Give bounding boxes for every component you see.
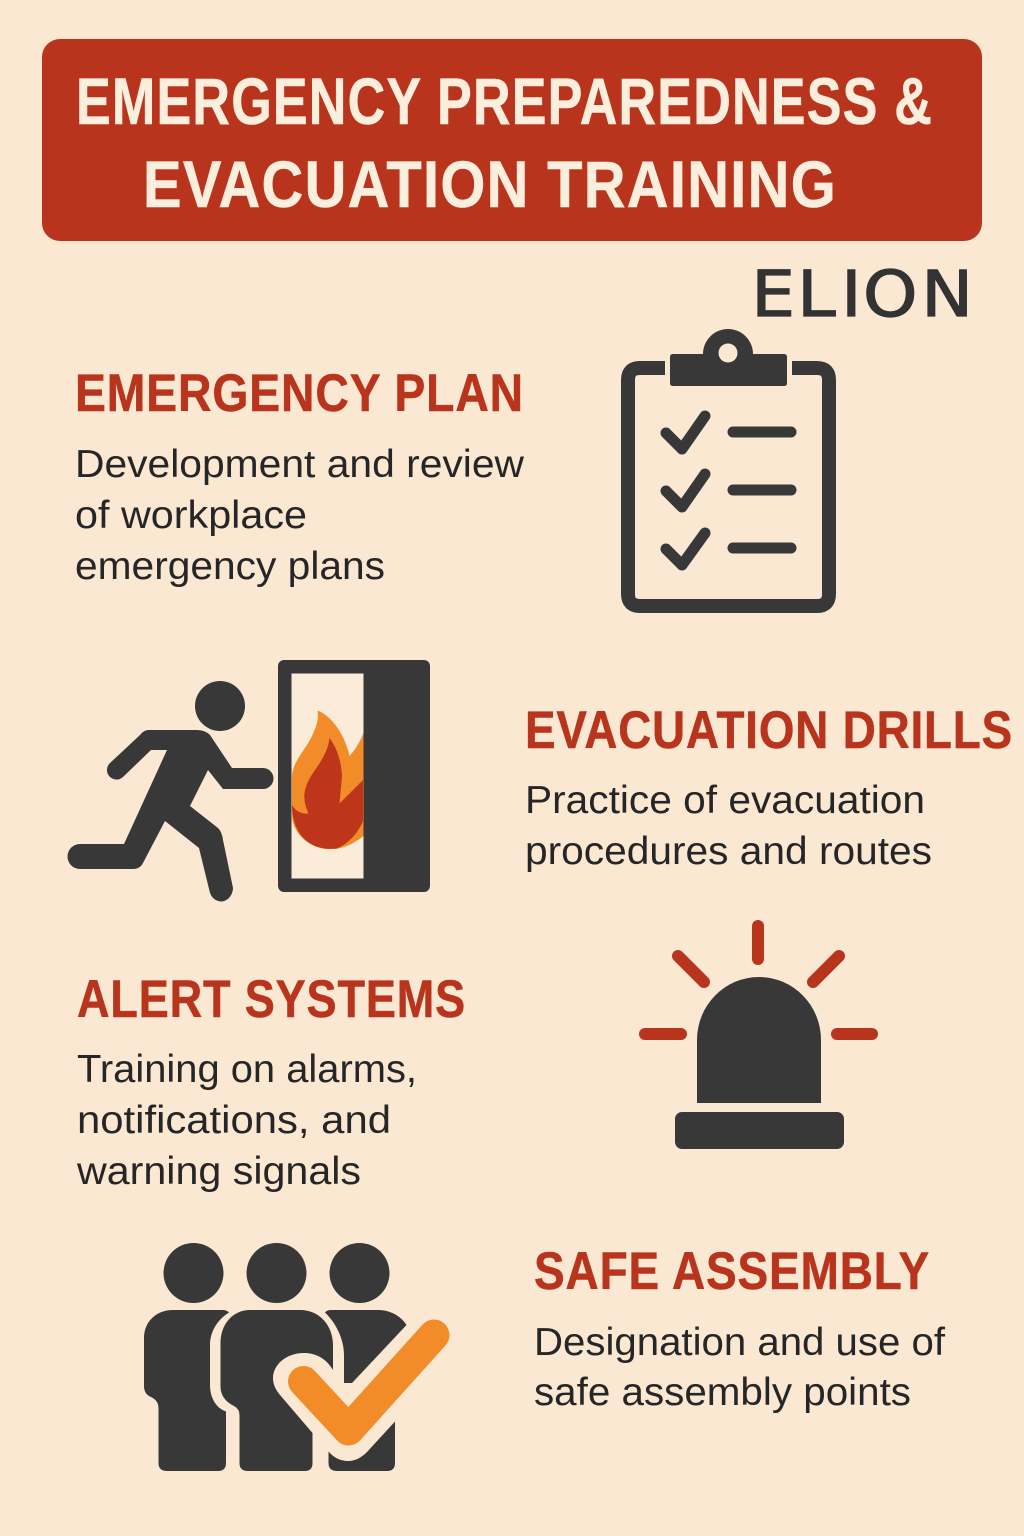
icon: clipboard checklist bbox=[628, 329, 829, 606]
text: alert systems description: notifications, and bbox=[77, 1099, 391, 1142]
title banner bbox=[42, 39, 982, 241]
text: evacuation drills description: Practice of evacuation bbox=[525, 779, 925, 822]
panel: evacuation drills bbox=[67, 660, 1013, 901]
heading: safe assembly: SAFE ASSEMBLY bbox=[534, 1242, 930, 1301]
text: emergency plan description: Development and review bbox=[75, 443, 525, 486]
heading: alert systems: ALERT SYSTEMS bbox=[77, 970, 466, 1029]
panel: alert systems bbox=[76, 926, 872, 1193]
panel: safe assembly bbox=[144, 1242, 956, 1471]
icon: group of people with check mark bbox=[144, 1243, 434, 1471]
text: alert systems description: warning signals bbox=[76, 1150, 361, 1193]
text: alert systems description: Training on alarms, bbox=[77, 1048, 417, 1091]
icon: alarm beacon bbox=[645, 926, 872, 1149]
logo: ELION: ELION bbox=[751, 258, 973, 331]
icon: person running from fire door bbox=[67, 660, 430, 901]
text: evacuation drills description: procedures and routes bbox=[525, 830, 932, 873]
text: emergency plan description: emergency plans bbox=[75, 545, 385, 588]
panel: emergency plan bbox=[75, 329, 829, 606]
heading: emergency plan: EMERGENCY PLAN bbox=[75, 364, 524, 423]
text: emergency plan description: of workplace bbox=[75, 494, 307, 537]
title banner: EVACUATION TRAINING bbox=[143, 147, 837, 221]
text: safe assembly description: safe assembly points bbox=[534, 1371, 911, 1414]
text: safe assembly description: Designation and use of bbox=[534, 1321, 945, 1364]
